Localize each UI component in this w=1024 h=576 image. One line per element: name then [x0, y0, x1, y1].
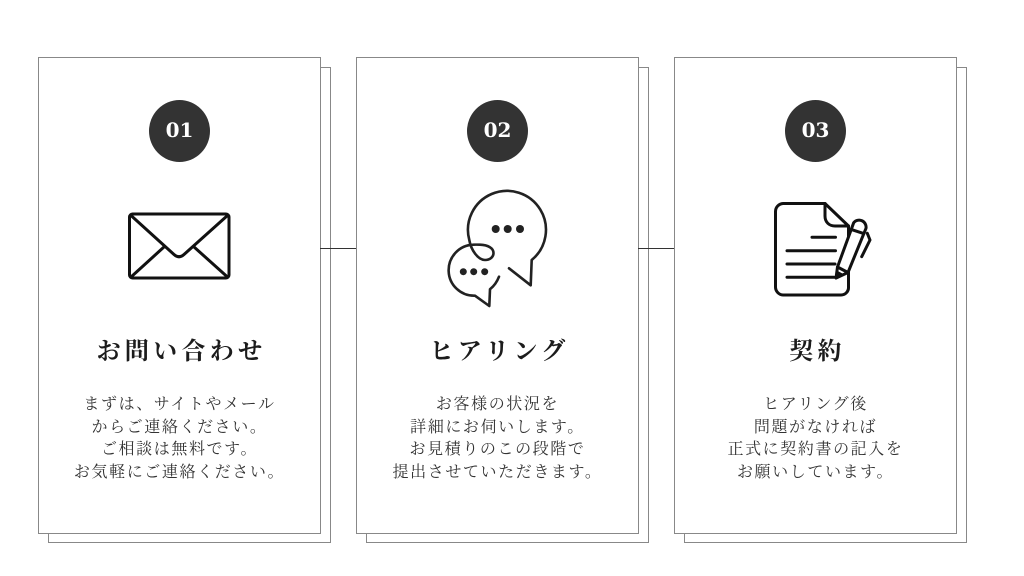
- number badge 03: [785, 100, 846, 162]
- description 03: 問題がなければ: [754, 419, 877, 436]
- icon: document and pen: [774, 202, 872, 296]
- connector 2 to 3: [638, 248, 674, 249]
- panel: step 03 contract: [674, 57, 967, 543]
- back sheet 01: [48, 67, 330, 543]
- heading 03: 契約: [789, 339, 846, 365]
- connector 1 to 2: [320, 248, 356, 249]
- description 03: お願いしています。: [737, 464, 894, 481]
- number badge 03: 03: [802, 118, 829, 142]
- panel: step 01 contact: [38, 57, 331, 543]
- description 02: お客様の状況を: [436, 396, 559, 413]
- description 03: 正式に契約書の記入を: [727, 441, 904, 458]
- icon: envelope: [128, 212, 230, 280]
- back sheet 03: [684, 67, 966, 543]
- description 02: お見積りのこの段階で: [409, 441, 586, 458]
- description 01: ご相談は無料です。: [101, 441, 258, 458]
- front card 03: [674, 57, 957, 534]
- heading 01: お問い合わせ: [97, 339, 266, 365]
- description 03: [727, 396, 904, 481]
- description 01: [74, 396, 285, 481]
- description 03: ヒアリング後: [763, 396, 868, 413]
- icon: speech bubbles: [447, 190, 548, 308]
- panel: step 02 hearing: [356, 57, 649, 543]
- description 02: 提出させていただきます。: [393, 464, 602, 481]
- description 01: からご連絡ください。: [91, 419, 268, 436]
- heading 02: ヒアリング: [429, 339, 570, 365]
- front card 02: [356, 57, 639, 534]
- number badge 01: [149, 100, 210, 162]
- number badge 02: 02: [484, 118, 511, 142]
- back sheet 02: [366, 67, 648, 543]
- number badge 02: [467, 100, 528, 162]
- description 02: [393, 395, 602, 481]
- description 02: 詳細にお伺いします。: [410, 419, 585, 436]
- description 01: まずは、サイトやメール: [83, 396, 276, 413]
- number badge 01: 01: [166, 118, 193, 142]
- description 01: お気軽にご連絡ください。: [74, 464, 285, 481]
- front card 01: [38, 57, 321, 534]
